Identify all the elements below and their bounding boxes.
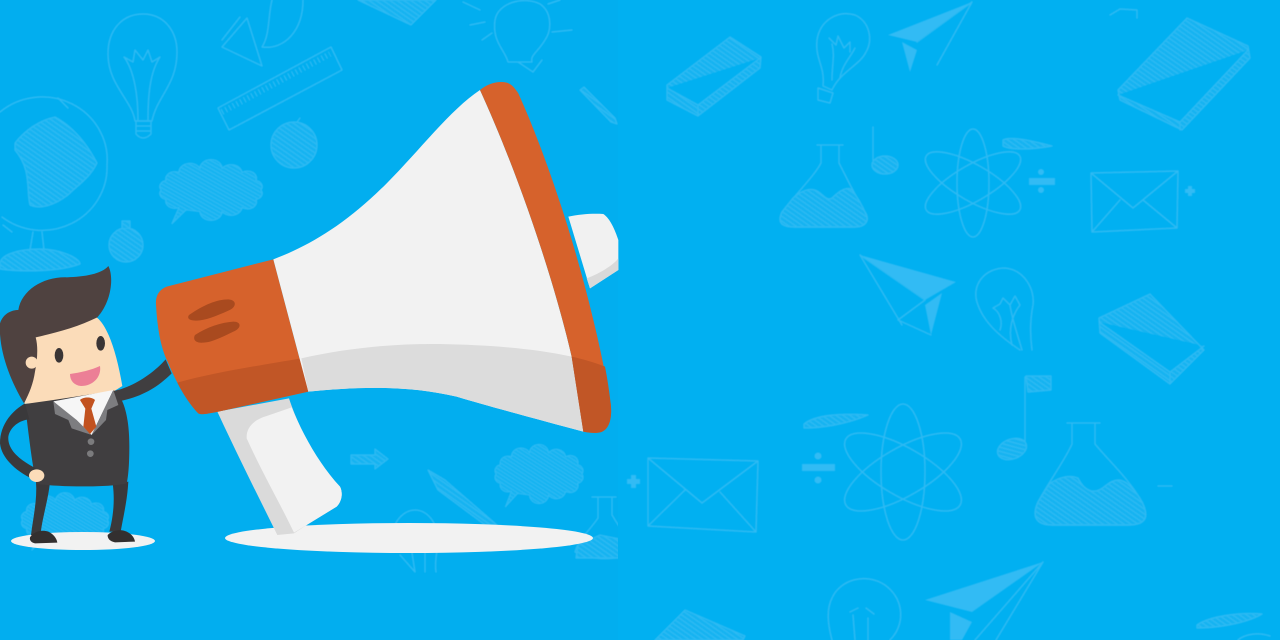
icon: divide lower — [802, 452, 835, 484]
icon: envelope upper — [1091, 171, 1178, 232]
man: left leg — [31, 482, 50, 535]
icon: book top — [358, 0, 436, 25]
icon: cloud behind man — [21, 493, 109, 550]
megaphone: rim — [480, 82, 611, 433]
man: hand — [29, 469, 44, 482]
icon: music note small — [872, 127, 898, 174]
ground shadow: megaphone — [225, 523, 593, 553]
background icons: right doodles — [627, 2, 1270, 640]
ground shadow: man — [11, 532, 155, 550]
icon: pencil flat lower — [804, 414, 868, 428]
man: raised arm — [115, 359, 172, 401]
man: mouth — [70, 366, 100, 386]
man character — [0, 266, 172, 543]
icon: music note large — [994, 376, 1051, 464]
man: right eye — [96, 336, 105, 351]
man: left lapel — [53, 401, 92, 435]
icon: pencil flat upper — [1003, 138, 1052, 149]
background icons: left doodles — [0, 0, 625, 572]
megaphone: horn — [273, 90, 583, 432]
icon: bulb middle — [976, 268, 1033, 350]
icon: flask bottom — [575, 497, 625, 559]
icon: bulb upper — [817, 14, 870, 103]
icon: globe — [0, 97, 107, 271]
man: left shoe — [30, 531, 57, 543]
icon: set square and arc arrow — [222, 0, 303, 66]
icon: dash marks — [1158, 485, 1172, 487]
man: tie — [80, 397, 96, 434]
icon: ruler — [218, 47, 342, 130]
megaphone: handle — [217, 398, 342, 535]
megaphone — [156, 82, 618, 535]
icon: light bulb top left — [108, 14, 177, 138]
icon: plus lower — [627, 475, 640, 488]
icon: atom upper — [917, 129, 1029, 237]
icon: envelope lower — [648, 458, 758, 532]
man: right lapel — [92, 390, 118, 435]
megaphone: rear cap — [568, 214, 618, 288]
icon: pencil flat corner — [1197, 613, 1262, 628]
man: shirt — [53, 390, 113, 435]
icon: right arrow — [351, 449, 388, 469]
man: bent arm — [0, 403, 36, 478]
icon: pen — [428, 470, 497, 525]
man: right shoe — [108, 530, 135, 542]
icon: cloud centre bottom — [495, 444, 583, 507]
icon: plus small — [1185, 186, 1195, 196]
icon: apple — [271, 118, 317, 168]
icon: flask upper — [780, 145, 867, 227]
icon: atom lower — [834, 404, 972, 540]
man: ear — [26, 357, 38, 369]
man: torso — [25, 391, 129, 486]
man: left eye — [55, 348, 63, 363]
icon: round flask — [109, 221, 143, 262]
icon: curl corner — [1238, 634, 1270, 640]
icon: paper plane upper — [888, 2, 972, 72]
icon: bulb lower — [828, 579, 901, 640]
icon: book large — [1118, 18, 1250, 130]
icon: book — [667, 37, 761, 116]
icon: small curl — [1110, 9, 1137, 18]
icon: flask lower — [1035, 423, 1146, 525]
man: jacket buttons — [87, 438, 94, 457]
right background tint — [618, 0, 1280, 640]
icon: bulb bottom — [392, 510, 438, 572]
icon: paper plane middle — [860, 255, 956, 335]
icon: small pencil — [580, 87, 617, 124]
icon: paper plane lower — [925, 562, 1043, 640]
icon: book lower — [655, 610, 745, 640]
megaphone: collar — [156, 259, 308, 414]
icon: divide upper — [1029, 169, 1055, 193]
icon: book middle — [1099, 294, 1204, 384]
man: face — [24, 317, 122, 404]
icon: bulb top centre — [463, 0, 572, 72]
icon: thought cloud — [160, 160, 262, 224]
man: hair — [0, 266, 111, 403]
man: right leg — [109, 482, 128, 532]
